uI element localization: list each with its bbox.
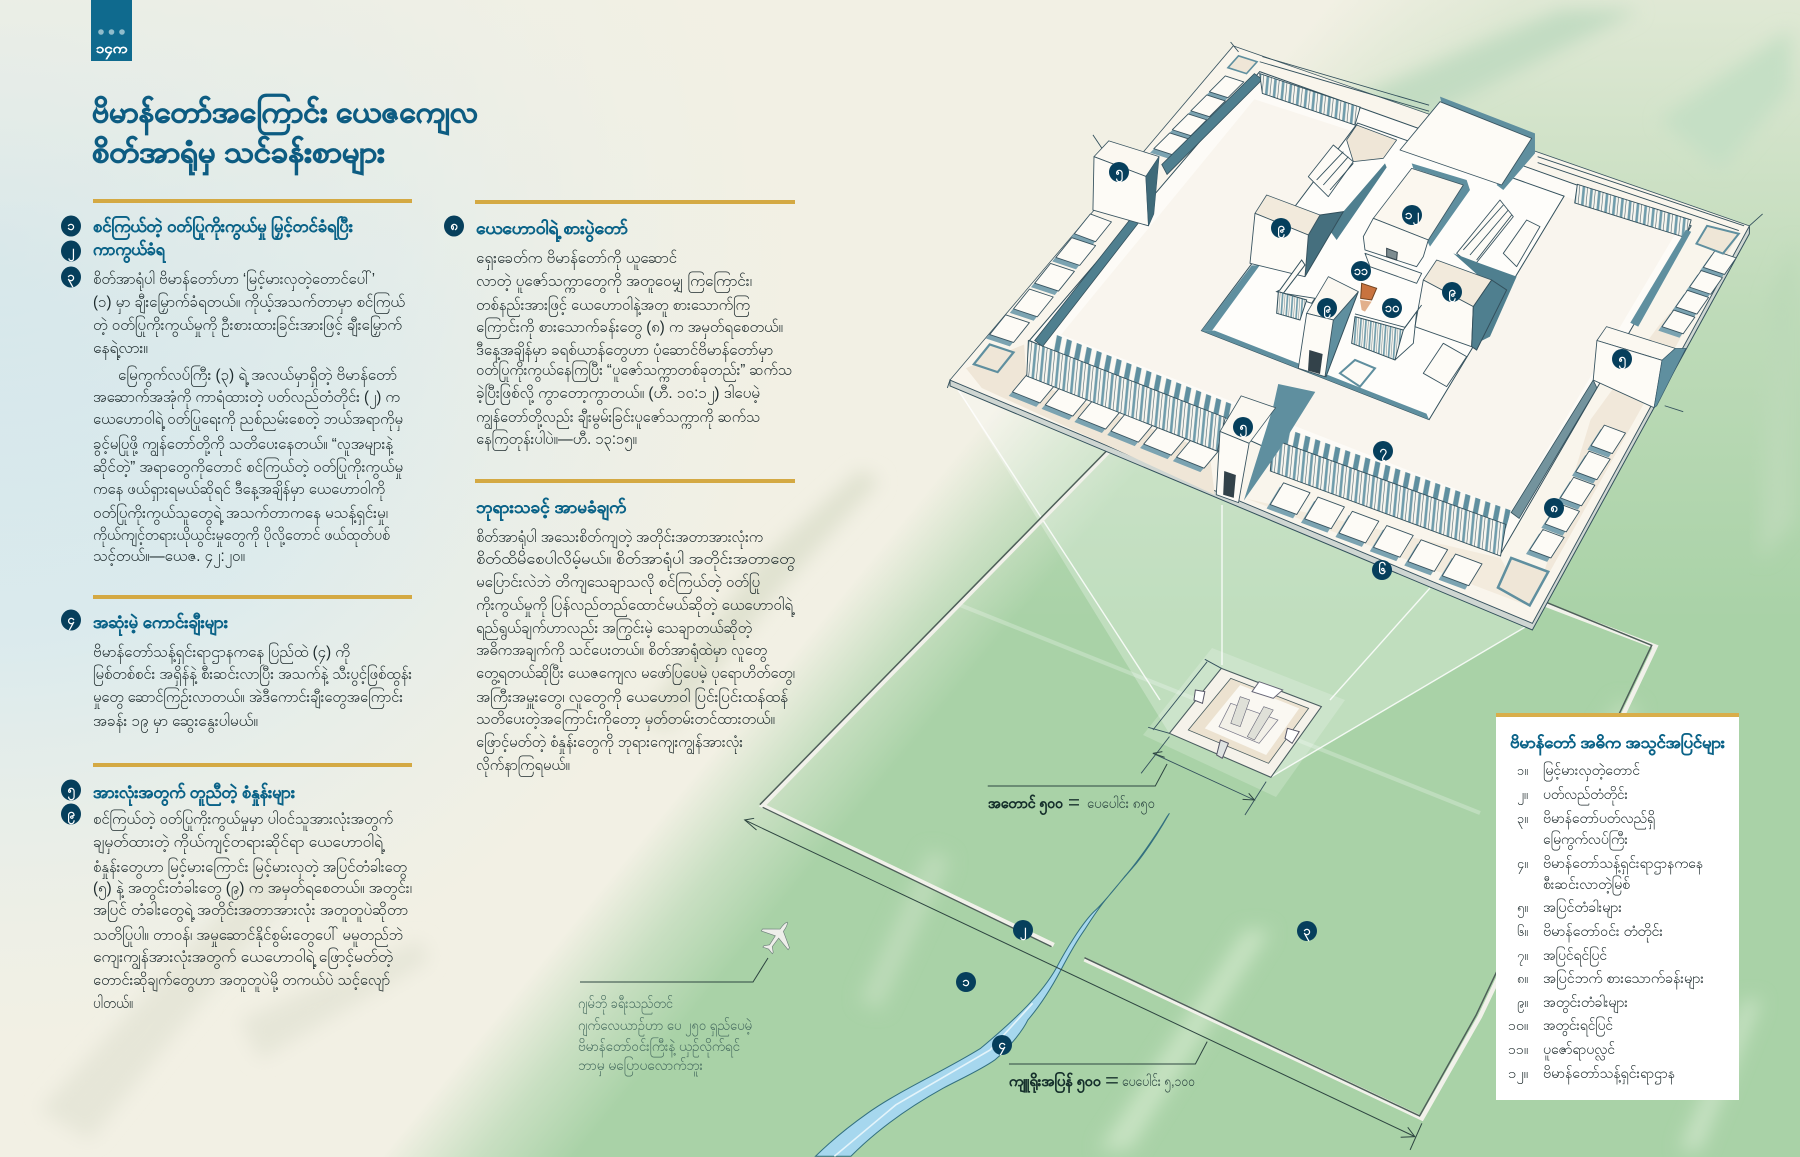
number badges: temple illustration [1109, 162, 1632, 580]
light beams from temple to scale model [953, 382, 1532, 797]
title: စိတ်အာရုံမှ သင်ခန်းစာများ [92, 135, 385, 176]
number badges: temple illustration: ၅ [1115, 164, 1123, 183]
body text: စိတ်အာရုံပါ အသေးစိတ်ကျတဲ့ အတိုင်းအတာအားလုံးက [476, 528, 763, 549]
page number tab: ၁၄က [96, 41, 127, 60]
legend numbers: ၁၀။ [1508, 1018, 1528, 1033]
dimension label: temple 500 cubits: ပေပေါင်း ၈၅၀ [1087, 795, 1155, 814]
body text: လာတဲ့ ပူဇော်သက္ကာတွေကို အတူဝေမျှ ကြကြောင်း၊ [476, 271, 752, 293]
body text: ခွင့်မပြုဖို့ ကျွန်တော်တို့ကို သတိပေးနေတယ်။ “လူအများနဲ့ [93, 434, 394, 457]
body text: ချမှတ်ထားတဲ့ ကိုယ်ကျင့်တရားဆိုင်ရာ ယေဟောဝါရဲ့ [93, 833, 386, 854]
legend numbers: ၁၂။ [1508, 1066, 1528, 1084]
body text: သတိပေးတဲ့အကြောင်းကိုတော့ မှတ်တမ်းတင်ထားတယ်။ [476, 709, 775, 731]
number badges: temple illustration: ၉ [1448, 284, 1456, 303]
body text: မြစ်တစ်စင်း အရှိန်နဲ့ စီးဆင်းလာပြီး အသက်နဲ့ သီးပွင့်ဖြစ်ထွန်း [93, 664, 412, 686]
dimension label: 500 reeds: ကျူရိုးအပြန် ၅၀၀ [1009, 1072, 1102, 1093]
legend numbers: ၈။ [1517, 971, 1528, 986]
legend numbers: ၃။ [1517, 811, 1528, 829]
number badges: land map: ၁ [962, 974, 970, 989]
dimension label: temple 500 cubits [988, 793, 1155, 815]
number badges: text column: ၁ [67, 218, 75, 233]
number badges: text column: ၉ [67, 806, 75, 825]
heading: pure worship exalted: ကာကွယ်ခံရ [93, 238, 166, 264]
legend numbers: ၁။ [1517, 763, 1528, 778]
number badges: text column: ၅ [67, 782, 75, 801]
number badges: land map: ၃ [1303, 923, 1311, 942]
caption: jet comparison: ဘာမှ မပြောပလောက်ဘူး [578, 1057, 703, 1076]
outer gates [1093, 141, 1686, 503]
legend numbers [1508, 763, 1528, 1084]
panel: Jehovah's table [475, 200, 795, 451]
number badges: temple illustration: ၆ [1378, 561, 1386, 577]
body text: အပြင် တံခါးတွေရဲ့ အတိုင်းအတာအားလုံး အတူတူပဲဆိုတာ [93, 900, 408, 922]
body text: တွေ့ရတယ်ဆိုပြီး ယေဇကျေလ မဖော်ပြပေမဲ့ ပုရောဟိတ်တွေ၊ [476, 663, 795, 685]
dimension label: 500 reeds [1009, 1071, 1195, 1093]
heading: endless blessings: အဆုံးမဲ့ ကောင်းချီးများ [93, 611, 229, 637]
body text: ရှေးခေတ်က ဗိမာန်တော်ကို ယူဆောင် [476, 249, 677, 270]
number badges: temple illustration: ၉ [1277, 220, 1285, 239]
page number tab [91, 0, 132, 61]
temple sanctuary, inner gates and altar [1250, 97, 1540, 387]
outer temple platform and courtyard [947, 42, 1763, 630]
number badges: temple illustration: ၇ [1379, 443, 1387, 462]
title: ဗိမာန်တော်အကြောင်း ယေဇကျေလ [92, 94, 478, 136]
number badges: text column: ၃ [67, 269, 75, 288]
chamber tops [990, 76, 1736, 586]
legend items: မြင့်မားလှတဲ့တောင် [1543, 762, 1640, 781]
body text: အဓိကအချက်ကို သင်ပေးတယ်။ စိတ်အာရုံထဲမှာ လူတွေ [476, 641, 767, 662]
body text: မပြောင်းလဲဘဲ တိကျသေချာသလို စင်ကြယ်တဲ့ ဝတ်ပြု [476, 572, 760, 594]
body text: ဝတ်ပြုကိုးကွယ်နေကြပြီး “ပူဇော်သက္ကာတစ်ခုတည်း” ဆက်သ [476, 360, 792, 382]
dimension label: temple 500 cubits: = [1068, 793, 1080, 814]
title [92, 94, 478, 176]
body text: ဝတ်ပြုကိုးကွယ်သူတွေရဲ့ အသက်တာကနေ မသန့်ရှင်းမှု၊ [93, 503, 388, 525]
legend items: အပြင်ရင်ပြင် [1543, 947, 1607, 966]
number badges: land map [956, 920, 1317, 1056]
legend numbers: ၁၁။ [1508, 1042, 1528, 1057]
body text: ဒီနေ့အချိန်မှာ ခရစ်ယာန်တွေဟာ ပုံဆောင်ဗိမာန်တော်မှာ [476, 341, 773, 362]
land grant boundary walls [760, 448, 1655, 1118]
body text: အဆောက်အအုံကို ကာရံထားတဲ့ ပတ်လည်တံတိုင်း (၂) က [93, 388, 400, 409]
body text: မြေကွက်လပ်ကြီး (၃) ရဲ့ အလယ်မှာရှိတဲ့ ဗိမာန်တော် [118, 365, 397, 387]
body text: ကျွန်တော်တို့လည်း ချီးမွမ်းခြင်းပူဇော်သက္ကာကို ဆက်သ [476, 407, 760, 430]
number badges: text column [61, 216, 464, 825]
body text: ရည်ရွယ်ချက်ဟာလည်း အကြွင်းမဲ့ သေချာတယ်ဆိုတဲ့ [476, 618, 752, 640]
heading: same standards for all: အားလုံးအတွက် တူညီတဲ့ စံနှုန်းများ [93, 781, 296, 807]
number badges: text column: ၈ [450, 218, 458, 233]
body text [476, 528, 796, 777]
dimension label: 500 reeds: = [1105, 1071, 1119, 1092]
colonnades: outer court walls [1027, 57, 1744, 556]
body text: ဗိမာန်တော်သန့်ရှင်းရာဌာနကနေ ပြည်ထဲ (၄) ကို [93, 642, 350, 664]
legend items: ဗိမာန်တော်ဝင်း တံတိုင်း [1543, 923, 1663, 942]
outer chambers: dining rooms [974, 56, 1739, 605]
leader line from jet to caption [580, 958, 768, 982]
body text: ခဲ့ပြီးဖြစ်လို့ ကွာတော့ကွာတယ်။ (ဟီ. ၁၀:၁၂) ဒါပေမဲ့ [476, 383, 760, 405]
heading: Jehovah's table: ယေဟောဝါရဲ့ စားပွဲတော် [476, 217, 628, 243]
body text: ကနေ ဖယ်ရှားရမယ်ဆိုရင် ဒီနေ့အချိန်မှာ ယေဟောဝါကို [93, 480, 385, 501]
legend items: အပြင်တံခါးများ [1543, 899, 1622, 918]
body text: စံနှုန်းတွေဟာ မြင့်မားကြောင်း မြင့်မားလှတဲ့ အပြင်တံခါးတွေ [93, 857, 407, 879]
body text [93, 269, 405, 568]
panel: key temple features legend [1496, 713, 1739, 1100]
body text: ကြောင်းကို စားသောက်ခန်းတွေ (၈) က အမှတ်ရစေတယ်။ [476, 317, 783, 339]
panel: same standards for all [93, 763, 412, 1012]
number badges: temple illustration: ၁၁ [1354, 263, 1369, 278]
body text: ယေဟောဝါရဲ့ ဝတ်ပြုရေးကို ညစ်ညမ်းစေတဲ့ ဘယ်အရာကိုမှ [93, 409, 403, 431]
legend items: ဗိမာန်တော်ပတ်လည်ရှိ [1543, 810, 1655, 829]
panel: endless blessings [93, 595, 412, 733]
number badges: temple illustration: ၅ [1239, 419, 1247, 438]
caption: jet comparison: ဂျမ်ဘို ခရီးသည်တင် [578, 995, 673, 1014]
body text: တောင်းဆိုချက်တွေဟာ အတူတူပဲမို့ တကယ်ပဲ သင့်လျော် [93, 971, 390, 992]
legend numbers: ၇။ [1517, 948, 1528, 966]
number badges: text column: ၄ [67, 612, 75, 631]
panel: God's guarantee [475, 479, 796, 777]
body text: လိုက်နာကြရမယ်။ [476, 755, 570, 777]
heading: God's guarantee: ဘုရားသခင့် အာမခံချက် [476, 496, 627, 522]
body text: အခန်း ၁၉ မှာ ဆွေးနွေးပါမယ်။ [93, 712, 258, 733]
panel: section pure worship exalted [93, 199, 412, 568]
dimension label: 500 reeds: ပေပေါင်း ၅,၁၀၀ [1122, 1073, 1195, 1092]
legend numbers: ၂။ [1517, 787, 1528, 805]
chamber shadows [986, 80, 1732, 590]
body text: စိတ်အာရုံပါ ဗိမာန်တော်ဟာ ‘မြင့်မားလှတဲ့တောင်ပေါ်’ [93, 269, 375, 291]
body text: ကိုးကွယ်မှုကို ပြန်လည်တည်ထောင်မယ်ဆိုတဲ့ ယေဟောဝါရဲ့ [476, 595, 796, 617]
number badges: text column: ၂ [68, 243, 75, 262]
scale model of the temple [1141, 659, 1321, 815]
number badges: temple illustration: ၁၀ [1385, 300, 1400, 315]
legend items: ဗိမာန်တော်သန့်ရှင်းရာဌာနကနေ [1543, 855, 1703, 874]
legend numbers: ၄။ [1517, 856, 1528, 874]
body text: (၁) မှာ ချီးမြှောက်ခံရတယ်။ ကိုယ့်အသက်တာမှာ စင်ကြယ် [93, 292, 405, 314]
legend numbers: ၆။ [1517, 924, 1528, 939]
icon: jumbo jet [754, 913, 801, 960]
legend items [1543, 762, 1704, 1084]
body text: တစ်နည်းအားဖြင့် ယေဟောဝါနဲ့အတူ စားသောက်ကြ [476, 295, 750, 317]
caption: jet comparison: ဗိမာန်တော်ဝင်းကြီးနဲ့ ယှဉ်လိုက်ရင် [578, 1038, 740, 1057]
number badges: temple illustration: ၁၂ [1405, 207, 1420, 226]
legend heading: ဗိမာန်တော် အဓိက အသွင်အပြင်များ [1510, 732, 1725, 756]
body text: မှုတွေ ဆောင်ကြဉ်းလာတယ်။ အဲဒီကောင်းချီးတွေအကြောင်း [93, 687, 403, 709]
body text: ကျေးကျွန်အားလုံးအတွက် ယေဟောဝါရဲ့ ဖြောင့်မတ်တဲ့ [93, 947, 393, 970]
number badges: temple illustration: ၈ [1550, 500, 1558, 515]
legend items: မြေကွက်လပ်ကြီး [1543, 831, 1628, 850]
dimension label: temple 500 cubits: အတောင် ၅၀၀ [988, 795, 1064, 815]
body text: နေရဲ့လား။ [93, 340, 148, 360]
body text: သတိပြုပါ။ တာဝန်၊ အမှုဆောင်နိုင်စွမ်းတွေပေါ် မမူတည်ဘဲ [93, 925, 403, 947]
body text: စိတ်ထိမိစေပါလိမ့်မယ်။ စိတ်အာရုံပါ အတိုင်းအတာတွေ [476, 550, 795, 571]
body text: သင့်တယ်။—ယေဇ. ၄၂:၂၀။ [93, 547, 245, 568]
body text [93, 642, 412, 733]
body text: ဖြောင့်မတ်တဲ့ စံနှုန်းတွေကို ဘုရားကျေးကျွန်အားလုံး [476, 732, 743, 755]
body text: တဲ့ ဝတ်ပြုကိုးကွယ်မှုကို ဦးစားထားခြင်းအားဖြင့် ချီးမြှောက် [93, 315, 402, 337]
legend items: ဗိမာန်တော်သန့်ရှင်းရာဌာန [1543, 1065, 1675, 1084]
legend items: အပြင်ဘက် စားသောက်ခန်းများ [1543, 970, 1704, 989]
number badges: temple illustration: ၅ [1618, 351, 1626, 370]
body text: အကြီးအမှူးတွေ၊ လူတွေကို ယေဟောဝါ ပြင်းပြင်းထန်ထန် [476, 687, 789, 709]
legend items: စီးဆင်းလာတဲ့မြစ် [1543, 876, 1630, 895]
body text: ကိုယ်ကျင့်တရားယိုယွင်းမှုတွေကို ပိုလို့တောင် ဖယ်ထုတ်ပစ် [93, 526, 390, 547]
body text: ဆိုင်တဲ့” အရာတွေကိုတောင် စင်ကြယ်တဲ့ ဝတ်ပြုကိုးကွယ်မှု [93, 457, 403, 479]
caption: jet comparison [578, 995, 752, 1076]
legend items: အတွင်းရင်ပြင် [1543, 1017, 1613, 1036]
body text: စင်ကြယ်တဲ့ ဝတ်ပြုကိုးကွယ်မှုမှာ ပါဝင်သူအားလုံးအတွက် [93, 809, 393, 831]
body text [93, 809, 412, 1012]
dimension line: long side of the temple land [745, 752, 1422, 1150]
heading: pure worship exalted: စင်ကြယ်တဲ့ ဝတ်ပြုကိုးကွယ်မှု မြှင့်တင်ခံရပြီး [93, 214, 354, 241]
heading: pure worship exalted [93, 214, 354, 264]
caption: jet comparison: ဂျက်လေယာဉ်ဟာ ပေ ၂၅၀ ရှည်ပေမဲ့ [578, 1017, 752, 1036]
legend numbers: ၉။ [1517, 995, 1528, 1013]
river [816, 813, 1169, 1156]
legend items: ပတ်လည်တံတိုင်း [1543, 786, 1628, 805]
body text: (၅) နဲ့ အတွင်းတံခါးတွေ (၉) က အမှတ်ရစေတယ်။ အတွင်း၊ [93, 879, 412, 900]
number badges: temple illustration: ၉ [1323, 300, 1331, 319]
number badges: land map: ၄ [998, 1037, 1006, 1056]
legend items: ပူဇော်ရာပလ္လင် [1543, 1041, 1615, 1060]
body text: နေကြတုန်းပါပဲ။—ဟီ. ၁၃:၁၅။ [476, 429, 637, 451]
legend items: အတွင်းတံခါးများ [1543, 994, 1628, 1013]
number badges: land map: ၂ [1020, 922, 1027, 941]
legend numbers: ၅။ [1517, 900, 1528, 918]
body text: ပါတယ်။ [93, 994, 133, 1012]
body text [476, 249, 792, 451]
